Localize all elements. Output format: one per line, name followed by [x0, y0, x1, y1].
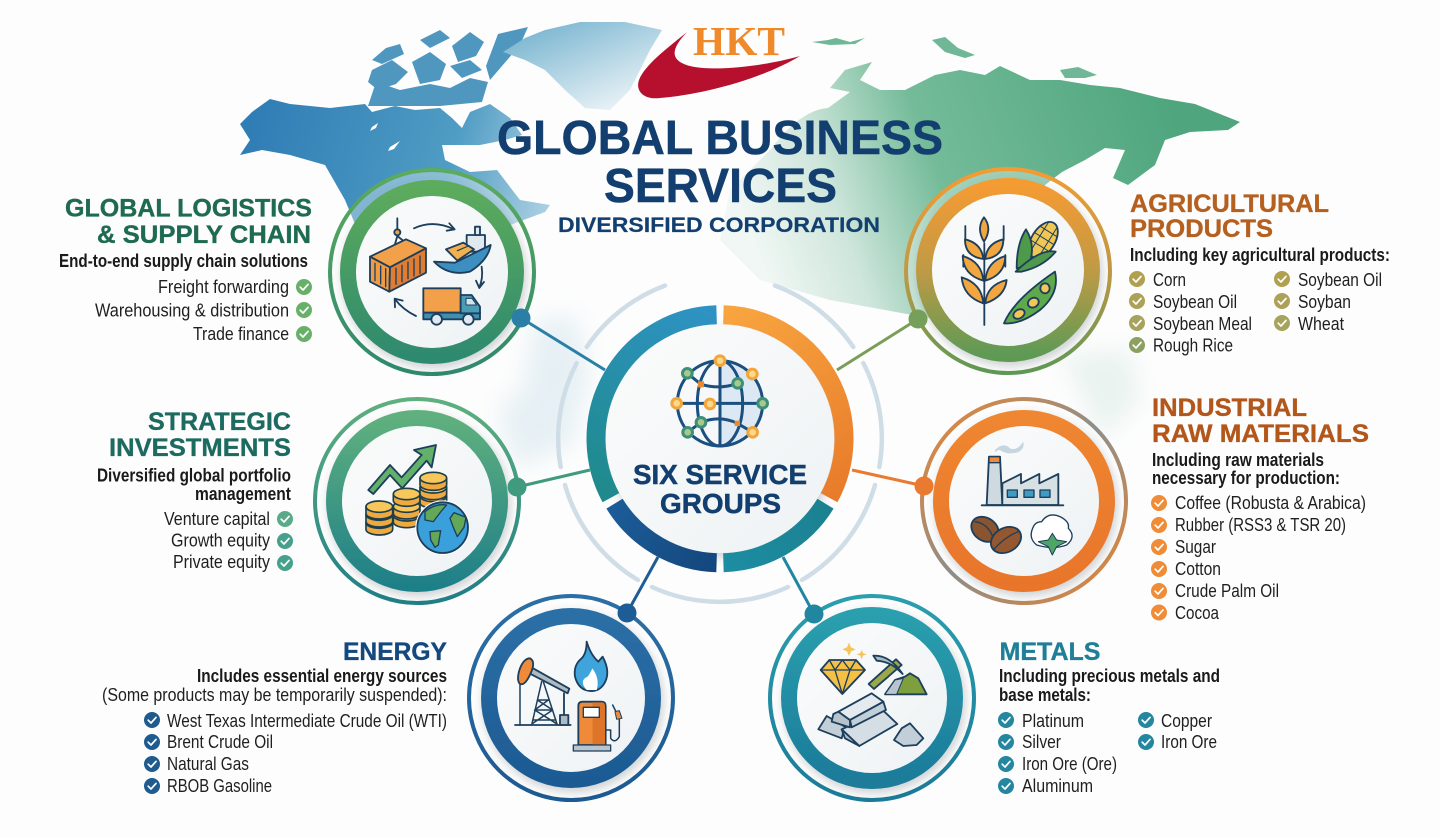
title: DIVERSIFIED CORPORATION [558, 214, 880, 237]
title: GLOBAL BUSINESS [497, 112, 943, 165]
node: logistics ring + icon [330, 170, 534, 374]
panel: industrial text: INDUSTRIAL [1152, 394, 1307, 422]
node: agricultural ring + icon [906, 169, 1110, 373]
panel: energy text: Includes essential energy sources [197, 666, 447, 686]
panel: metals text: Iron Ore (Ore) [1022, 753, 1117, 774]
hub label: SIX SERVICE [633, 459, 807, 490]
panel: energy text: Natural Gas [167, 753, 249, 774]
panel: industrial text [1151, 394, 1369, 623]
panel: industrial text: Coffee (Robusta & Arabica) [1175, 492, 1366, 513]
panel: metals text: Including precious metals and [999, 666, 1220, 686]
panel: industrial text: necessary for production: [1152, 468, 1340, 488]
node: energy ring + icon [469, 596, 673, 800]
panel: strategic investments text: Growth equity [171, 530, 271, 550]
panel: industrial text: Cotton [1175, 558, 1221, 579]
panel: metals text: METALS [1000, 638, 1100, 666]
panel: logistics text: Freight forwarding [158, 276, 289, 297]
icon: diamond pickaxe ingots [818, 643, 927, 746]
panel: agricultural text: Corn [1153, 269, 1186, 290]
panel: agricultural text: Soybean Oil [1153, 291, 1237, 312]
panel: strategic investments text: Diversified global portfolio [97, 466, 291, 486]
panel: energy text: (Some products may be temporarily suspended): [102, 684, 447, 705]
panel: metals text [998, 638, 1220, 796]
icon: factory coffee cotton [966, 442, 1072, 558]
panel: strategic investments text [97, 408, 293, 572]
panel: agricultural text [1129, 190, 1390, 356]
panel: logistics text: End-to-end supply chain solutions [59, 251, 308, 271]
panel: metals text: Aluminum [1022, 775, 1093, 796]
panel: energy text: Brent Crude Oil [167, 731, 273, 752]
connector lines [517, 318, 924, 614]
panel: metals text: Iron Ore [1161, 731, 1217, 752]
panel: metals text: Platinum [1022, 710, 1084, 731]
panel: strategic investments text: Venture capital [164, 508, 270, 529]
node: industrial ring + icon [914, 399, 1126, 603]
panel: industrial text: Rubber (RSS3 & TSR 20) [1175, 514, 1346, 535]
title: SERVICES [604, 160, 837, 213]
panel: logistics text [59, 194, 312, 344]
node: strategic investments ring + icon [315, 399, 526, 603]
icon: container ship truck cycle [370, 218, 491, 325]
panel: strategic investments text: INVESTMENTS [109, 434, 291, 462]
world map [240, 22, 1240, 470]
panel: industrial text: Including raw materials [1152, 450, 1324, 470]
panel: logistics text: GLOBAL LOGISTICS [65, 194, 312, 222]
icon: growth arrow coins globe [366, 445, 470, 555]
panel: logistics text: & SUPPLY CHAIN [97, 221, 311, 249]
panel: agricultural text: Rough Rice [1153, 334, 1233, 356]
panel: agricultural text: Wheat [1298, 313, 1344, 334]
icon: wheat corn soybean [962, 217, 1064, 325]
center hub: six service groups [596, 315, 844, 563]
panel: metals text: base metals: [999, 685, 1091, 705]
center hub: six service groups: GROUPS [660, 488, 781, 519]
logo: HKT swoosh [638, 18, 800, 98]
panel: agricultural text: Soybean Oil [1298, 269, 1382, 290]
hub ring segments [596, 315, 844, 563]
panel: energy text: ENERGY [343, 638, 447, 666]
panel: logistics text: Warehousing & distribution [95, 300, 289, 320]
panel: industrial text: Crude Palm Oil [1175, 580, 1279, 601]
panel: industrial text: Cocoa [1175, 602, 1220, 623]
panel: industrial text: Sugar [1175, 536, 1216, 557]
panel: metals text: Silver [1022, 731, 1061, 752]
panel: agricultural text: Including key agricultural products: [1130, 245, 1390, 265]
logo: HKT swoosh: HKT [693, 18, 785, 64]
panel: strategic investments text: management [195, 484, 291, 504]
icon: oil pump flame fuel [515, 642, 622, 751]
panel: agricultural text: Soyban [1298, 291, 1351, 312]
node: metals ring + icon [770, 596, 974, 800]
icon: network globe [670, 354, 769, 446]
panel: strategic investments text: STRATEGIC [148, 408, 291, 436]
panel: energy text: West Texas Intermediate Crude Oil (WTI) [167, 710, 447, 731]
panel: metals text: Copper [1161, 710, 1212, 731]
outer pale ring segments [558, 286, 882, 602]
title [497, 112, 943, 237]
panel: agricultural text: PRODUCTS [1130, 215, 1273, 243]
panel: energy text: RBOB Gasoline [167, 775, 272, 796]
panel: industrial text: RAW MATERIALS [1152, 420, 1369, 448]
panel: agricultural text: AGRICULTURAL [1130, 190, 1329, 218]
panel: energy text [102, 638, 447, 796]
panel: logistics text: Trade finance [193, 323, 289, 344]
panel: agricultural text: Soybean Meal [1153, 313, 1252, 334]
panel: strategic investments text: Private equity [173, 551, 271, 572]
